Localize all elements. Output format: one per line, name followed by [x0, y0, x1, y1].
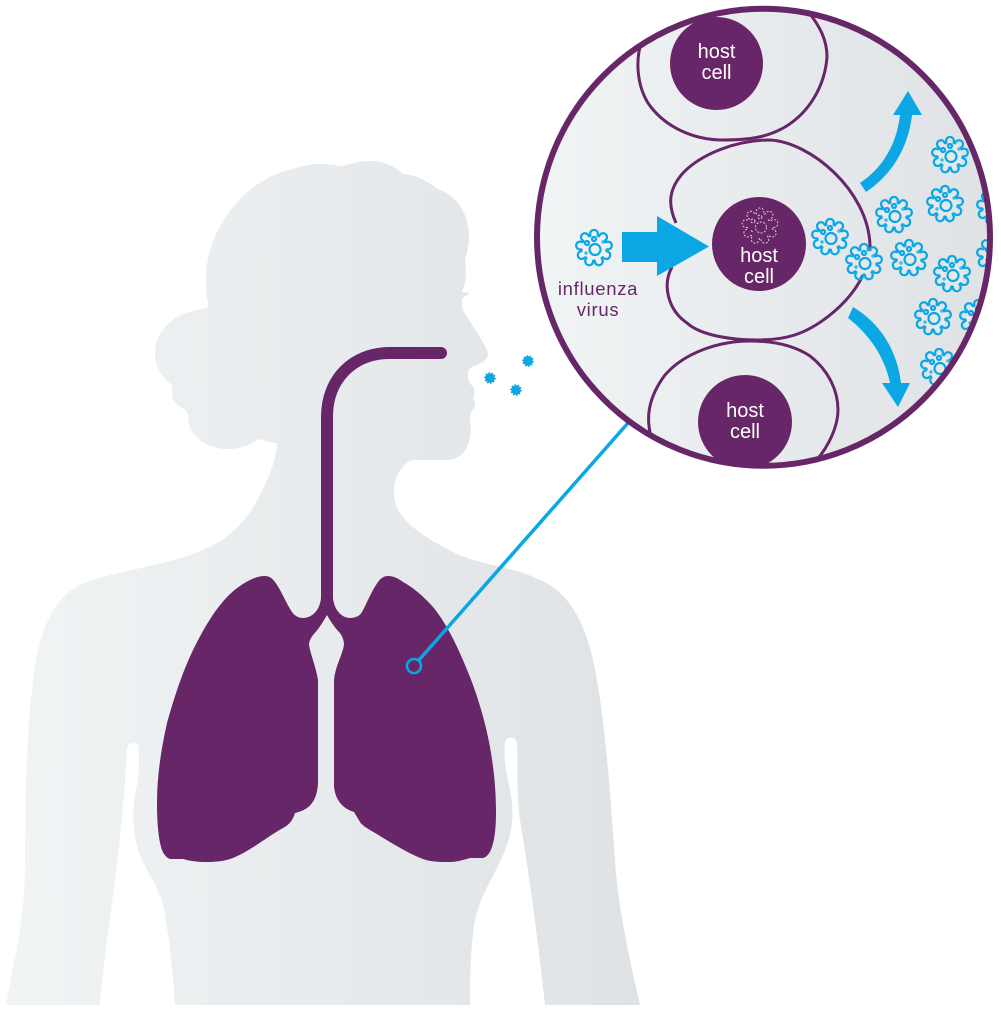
magnifier ring [537, 9, 990, 466]
arrow: release down [848, 307, 910, 407]
central infected cell: cell [744, 266, 774, 288]
influenza virus icon [575, 230, 613, 266]
left lung [157, 576, 333, 862]
right lung [321, 576, 496, 862]
central infected cell: host [740, 245, 778, 267]
exhaled virus particles [485, 356, 533, 395]
dashed virus inside nucleus [741, 208, 779, 244]
arrow: virus entering cell [622, 216, 709, 276]
central infected cell [667, 140, 870, 340]
lungs [157, 576, 496, 862]
top cell [638, 14, 827, 140]
bottom cell [649, 341, 838, 469]
pointer line from lung to magnifier [407, 423, 628, 673]
label: influenza virus: influenza [558, 278, 638, 299]
released viruses [811, 137, 1001, 385]
arrow: release up [860, 91, 922, 192]
bottom cell: cell [730, 421, 760, 443]
airway: trachea [327, 353, 441, 600]
label: influenza virus [558, 278, 638, 320]
body silhouette [6, 161, 640, 1005]
top cell: host [698, 41, 736, 63]
top cell: cell [701, 62, 732, 84]
magnified circle [537, 9, 1001, 469]
bottom cell: host [726, 400, 764, 422]
label: influenza virus: virus [577, 299, 619, 320]
